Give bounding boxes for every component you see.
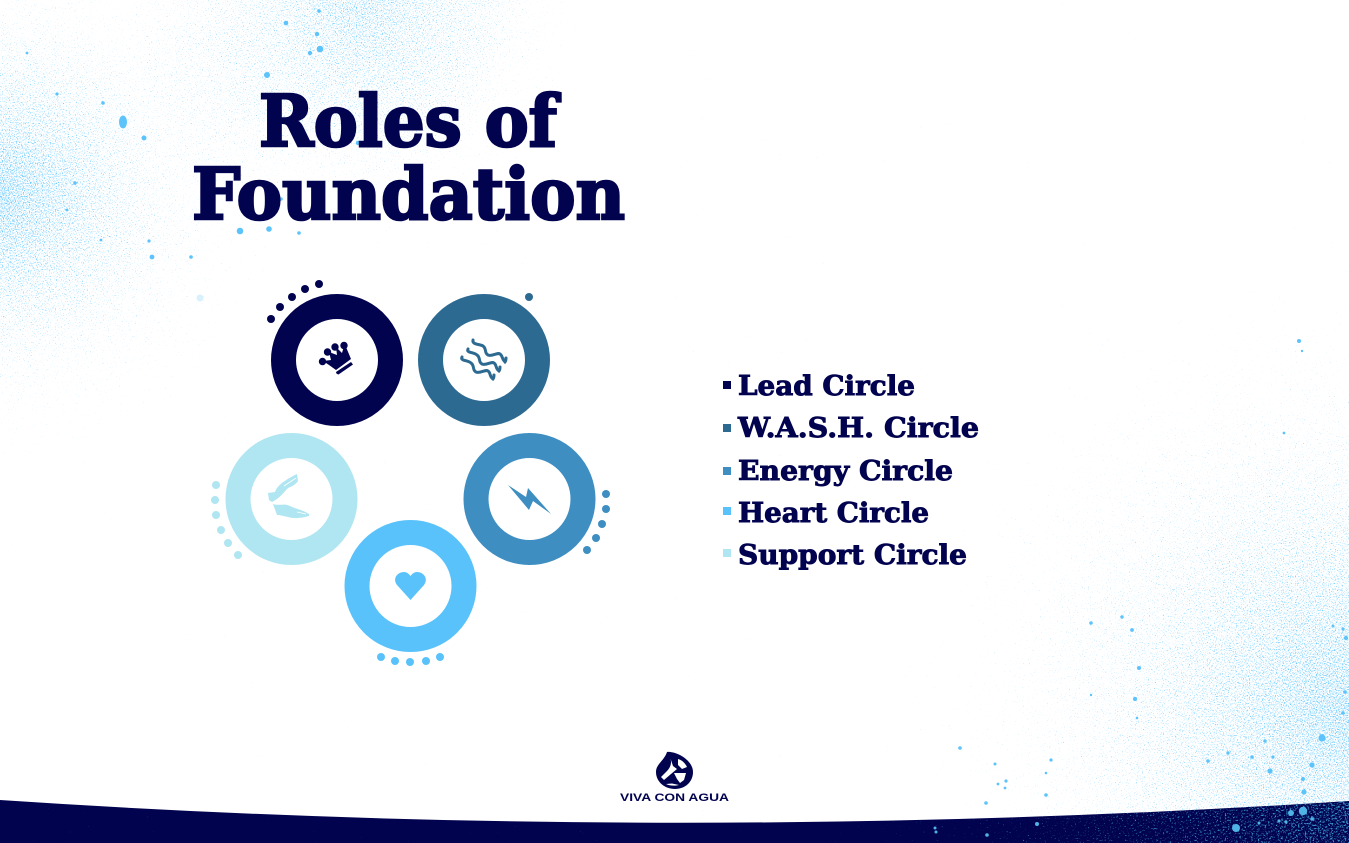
support circle xyxy=(211,446,345,559)
title xyxy=(192,79,625,236)
legend xyxy=(723,371,979,571)
icon: crown xyxy=(319,342,353,374)
legend item: wash: W.A.S.H. Circle xyxy=(737,413,979,444)
icon: lightning bolt xyxy=(508,485,551,514)
icon: caring hands xyxy=(268,474,309,518)
wash circle xyxy=(430,293,538,414)
title: Roles of xyxy=(259,79,561,163)
title: Foundation xyxy=(192,152,625,236)
panel: circles diagram xyxy=(211,280,610,666)
bottom navy band xyxy=(0,800,1349,843)
legend item: support: Support Circle xyxy=(738,540,967,571)
icon: heart xyxy=(395,572,426,600)
legend item: energy: Energy Circle xyxy=(738,456,953,487)
icon: water waves xyxy=(462,340,506,379)
energy circle xyxy=(476,446,610,554)
legend item: lead: Lead Circle xyxy=(738,371,915,402)
logo: viva con agua: VIVA CON AGUA xyxy=(620,792,729,804)
legend item: heart: Heart Circle xyxy=(738,498,929,529)
heart circle xyxy=(357,532,464,666)
logo: viva con agua xyxy=(620,752,729,804)
lead circle xyxy=(267,280,390,414)
